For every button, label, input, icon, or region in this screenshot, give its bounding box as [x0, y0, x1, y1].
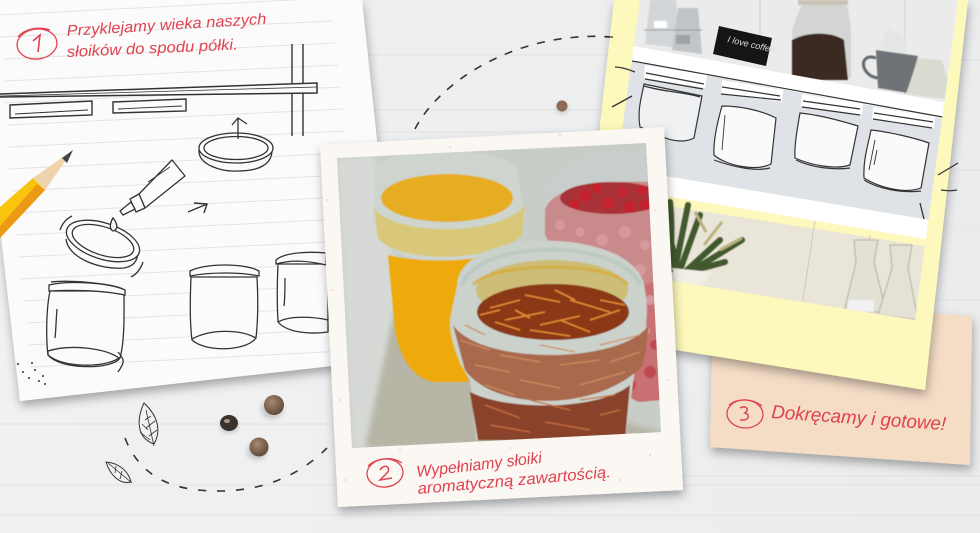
plant — [668, 202, 742, 286]
jar 2 — [714, 80, 783, 169]
sheet of paper — [0, 0, 385, 401]
photo of shelves — [622, 0, 958, 320]
step 1 caption — [66, 11, 267, 61]
table — [330, 140, 670, 450]
chalkboard: I love coffee — [727, 34, 776, 55]
step 2 number — [366, 457, 404, 489]
icon: pencil — [0, 150, 73, 238]
middle wall — [622, 62, 942, 236]
ruled lines — [0, 0, 345, 367]
yellow jar — [373, 151, 525, 382]
yellow frame — [600, 0, 968, 390]
shelf under line — [632, 61, 948, 118]
step 2 caption — [416, 450, 612, 498]
step 1 caption: Przyklejamy wieka naszych — [66, 11, 267, 40]
step 1 caption: słoików do spodu półki. — [66, 37, 238, 61]
white frame — [320, 127, 683, 507]
shelf sketch with uprights and lids — [0, 44, 317, 136]
jar sketch 3 — [276, 252, 328, 333]
drawn jars under the shelf — [639, 65, 935, 192]
glue tube — [110, 160, 185, 231]
step 2 caption: Wypełniamy słoiki — [416, 450, 543, 481]
lower wall — [672, 206, 925, 320]
tilted lid with glue drop — [60, 212, 145, 277]
step 1 number — [16, 27, 58, 61]
icon: small leaf — [106, 462, 132, 483]
panel: step 2 polaroid — [320, 127, 683, 507]
red berry jar — [545, 150, 664, 402]
jar 3 — [795, 94, 863, 169]
lid with up arrow — [199, 118, 273, 171]
sketch ticks on frame — [605, 37, 958, 219]
beige note paper — [710, 297, 972, 465]
panel: step 1 notebook sheet — [0, 0, 385, 401]
chalkboard — [713, 26, 776, 66]
step 3 caption: Dokręcamy i gotowe! — [771, 402, 947, 435]
dashed arrow top — [415, 36, 612, 129]
spice on table — [556, 100, 568, 114]
clip-top bottles — [844, 240, 918, 320]
step 2 caption: aromatyczną zawartością. — [417, 464, 612, 498]
coffee jar — [792, 0, 851, 80]
peppercorns — [220, 395, 284, 460]
dashed arrow bottom — [125, 438, 327, 491]
grey mug and jug — [861, 36, 948, 99]
icon: large leaf — [139, 403, 158, 446]
upper wall — [624, 0, 958, 120]
glass bottles — [644, 0, 702, 54]
jar 1 — [639, 65, 707, 141]
decorative dots — [17, 362, 46, 385]
saffron jar — [450, 241, 649, 440]
jar sketch 1 — [47, 281, 125, 372]
photo of spice jars — [330, 140, 670, 450]
jar sketch 2 — [190, 265, 259, 349]
panel: step 3 note — [710, 297, 972, 465]
jar 4 — [864, 107, 935, 192]
top shelf — [632, 46, 944, 118]
panel: step 3 yellow polaroid — [600, 0, 980, 390]
speckles on frame — [326, 134, 669, 481]
small arrow — [188, 203, 207, 213]
step 3 number — [726, 399, 764, 429]
lower shelf — [666, 176, 928, 240]
